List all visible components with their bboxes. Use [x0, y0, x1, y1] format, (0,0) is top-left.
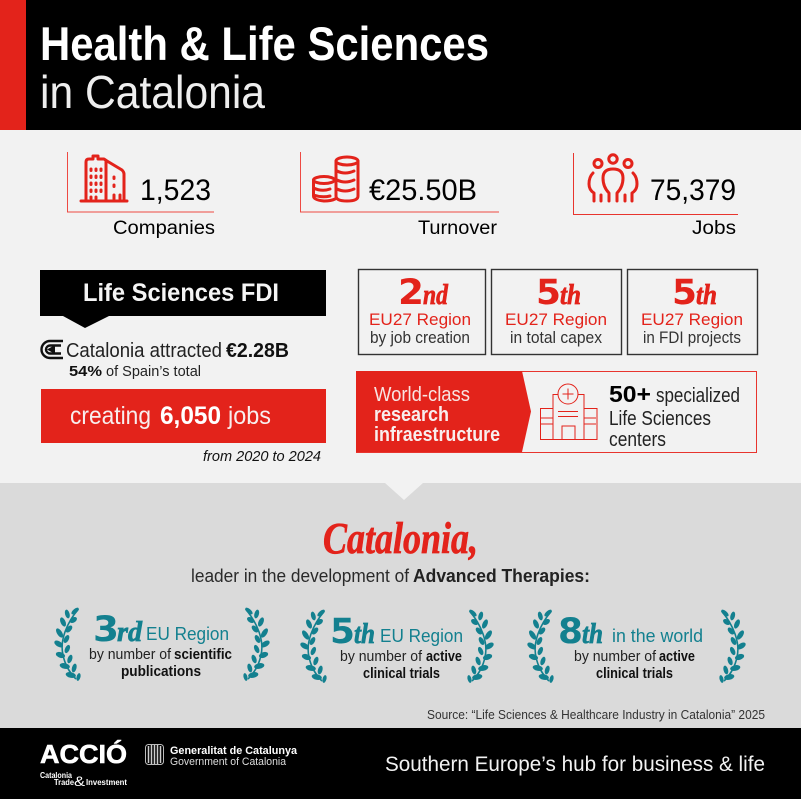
stat: turnover: €25.50B	[369, 174, 477, 207]
page background	[0, 130, 801, 483]
stat: jobs: 75,379	[650, 174, 736, 207]
ranking card: job creation: 2	[398, 273, 424, 313]
jobs banner: jobs	[227, 402, 271, 430]
award: scientific publications: by number of	[89, 646, 172, 663]
jobs banner: 6,050	[160, 402, 221, 430]
award: world clinical trials: 8	[558, 612, 583, 652]
FDI amount: 54%	[69, 363, 102, 380]
title	[40, 17, 489, 118]
award: world clinical trials: by number of	[574, 648, 657, 665]
ranking card: FDI projects: EU27 Region	[641, 310, 743, 329]
red arrow label: World-class	[374, 384, 470, 406]
icon: people	[589, 155, 637, 201]
ranking card: job creation: by job creation	[370, 329, 470, 347]
stat: companies	[68, 152, 215, 239]
centers text: Life Sciences	[609, 408, 711, 430]
logo: Generalitat: Generalitat de Catalunya	[170, 745, 298, 757]
stat: companies: Companies	[113, 218, 215, 239]
ranking card: total capex: EU27 Region	[505, 310, 607, 329]
ranking card: total capex: in total capex	[510, 329, 603, 347]
award: scientific publications: publications	[121, 663, 201, 680]
ranking card: FDI projects: in FDI projects	[643, 329, 741, 347]
red arrow label: research	[374, 404, 449, 426]
logo: Generalitat: Government of Catalonia	[170, 756, 287, 768]
award: EU clinical trials: th	[354, 619, 375, 650]
icon: magnet	[42, 341, 63, 358]
header band	[0, 0, 801, 130]
logo: ACCIO	[40, 739, 127, 789]
award: EU clinical trials: 5	[330, 612, 355, 652]
ranking card: FDI projects	[628, 270, 758, 354]
logo: ACCIO: ACCIÓ	[40, 739, 127, 769]
FDI amount: Catalonia attracted	[66, 340, 222, 362]
title: in Catalonia	[40, 66, 265, 118]
laurel right	[243, 606, 271, 682]
laurel right	[467, 608, 495, 684]
award: scientific publications	[53, 606, 271, 682]
ranking card: total capex: th	[560, 280, 581, 311]
logo: ACCIO: &	[74, 773, 86, 789]
red arrow label: infraestructure	[374, 424, 500, 446]
award: scientific publications: EU Region	[146, 624, 229, 644]
award: world clinical trials	[526, 608, 747, 684]
centers text	[609, 381, 740, 451]
FDI heading banner: Life Sciences FDI	[83, 279, 279, 307]
ranking card: total capex: 5	[536, 273, 561, 313]
panel: research infrastructure	[356, 371, 756, 452]
award: EU clinical trials: by number of	[340, 648, 423, 665]
award: EU clinical trials: active	[426, 648, 462, 665]
panel: advanced therapies	[0, 483, 801, 728]
heading: leader in the development of	[191, 565, 410, 586]
laurel right	[719, 608, 747, 684]
tagline: Southern Europe’s hub for business & life	[385, 753, 765, 776]
laurel left	[526, 608, 554, 684]
award: scientific publications: rd	[117, 617, 143, 648]
ranking card: FDI projects: 5	[672, 273, 697, 313]
ranking card: job creation	[358, 270, 486, 354]
red arrow label	[356, 371, 531, 452]
heading	[191, 514, 590, 586]
stat: companies: 1,523	[140, 174, 211, 207]
award: world clinical trials: active	[659, 648, 695, 665]
stat: jobs: Jobs	[692, 218, 736, 239]
jobs banner: creating	[70, 402, 151, 430]
FDI amount: €2.28B	[226, 340, 289, 362]
period note: from 2020 to 2024	[203, 448, 321, 465]
logo: Generalitat	[146, 744, 298, 768]
heading: Catalonia,	[323, 514, 478, 563]
logo: ACCIO: Investment	[86, 778, 127, 787]
jobs banner	[41, 389, 326, 443]
ranking card: total capex	[492, 270, 622, 354]
FDI amount	[66, 340, 289, 380]
ranking card: job creation: EU27 Region	[369, 310, 471, 329]
centers text: 50+	[609, 381, 651, 407]
centers text: centers	[609, 429, 666, 451]
ranking card: job creation: nd	[423, 280, 449, 311]
title: Health & Life Sciences	[40, 17, 489, 70]
icon: hospital	[540, 384, 597, 440]
award: world clinical trials: clinical trials	[596, 665, 673, 682]
FDI heading banner	[40, 270, 326, 328]
panel: life sciences FDI	[40, 270, 326, 465]
logo: ACCIO: Trade	[54, 778, 75, 787]
award: EU clinical trials	[299, 608, 495, 684]
ranking card: FDI projects: th	[696, 280, 717, 311]
stat: jobs	[574, 153, 738, 239]
logo: ACCIO: Catalonia	[40, 771, 72, 780]
icon: coins	[314, 157, 358, 201]
stat: turnover	[300, 152, 499, 239]
icon: building	[81, 156, 127, 201]
laurel left	[299, 608, 327, 684]
footer	[0, 728, 801, 799]
award: EU clinical trials: clinical trials	[363, 665, 440, 682]
laurel left	[53, 606, 81, 682]
award: scientific publications: 3	[93, 610, 119, 650]
heading: Advanced Therapies:	[413, 565, 590, 586]
award: EU clinical trials: EU Region	[380, 626, 463, 646]
award: world clinical trials: th	[582, 619, 603, 650]
centers text: specialized	[656, 385, 740, 407]
FDI amount: of Spain’s total	[106, 363, 201, 380]
source: Source: “Life Sciences & Healthcare Industry in Catalonia” 2025	[427, 707, 765, 722]
award: world clinical trials: in the world	[612, 626, 703, 646]
stat: turnover: Turnover	[418, 218, 498, 239]
award: scientific publications: scientific	[174, 646, 232, 663]
